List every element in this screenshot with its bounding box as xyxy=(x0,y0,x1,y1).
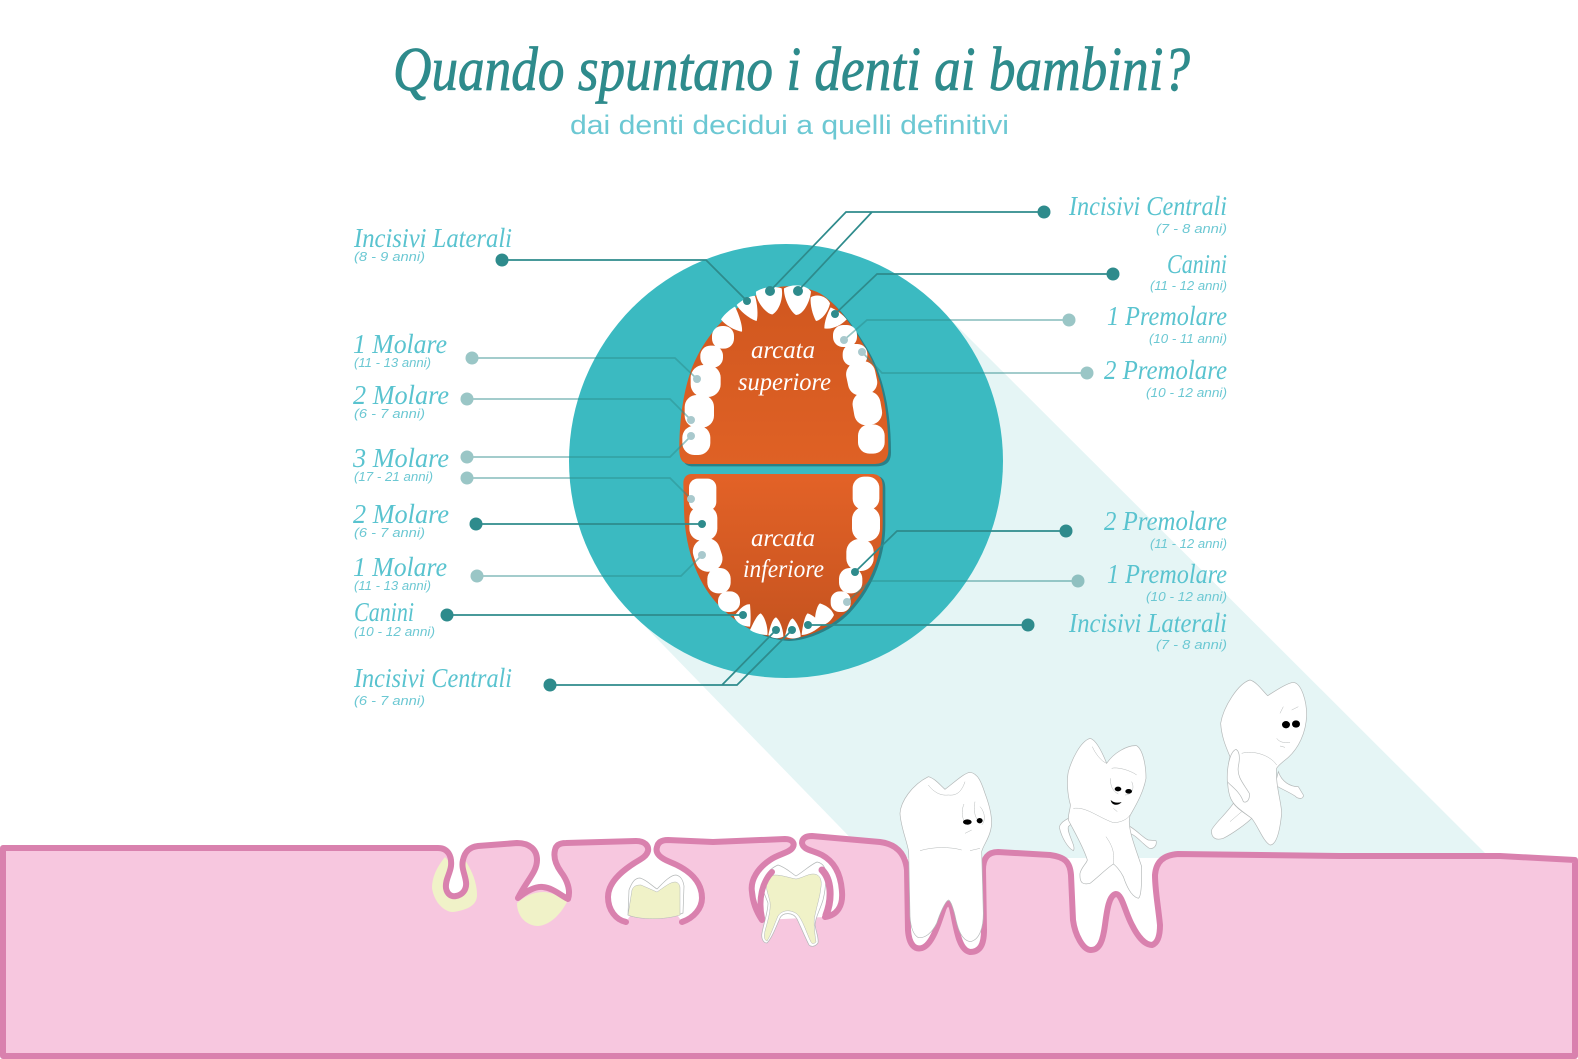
label: 2 Premolare (10 - 12 anni): 2 Premolare xyxy=(1104,355,1227,385)
tooth character 3, running away xyxy=(1212,680,1307,845)
label: Incisivi Centrali (6 - 7 anni): Incisivi Centrali xyxy=(353,663,512,693)
left arm xyxy=(1059,815,1078,851)
gum outline xyxy=(3,836,1575,1056)
label: Canini (11 - 12 anni) xyxy=(1150,249,1227,293)
label: 3 Molare (17 - 21 anni): (17 - 21 anni) xyxy=(354,469,433,484)
label: 3 Molare (17 - 21 anni): 3 Molare xyxy=(352,443,449,473)
back root xyxy=(1212,803,1252,839)
label: 1 Molare (11 - 13 anni) lower: (11 - 13 anni) xyxy=(354,578,431,593)
label: Incisivi Laterali (8 - 9 anni): Incisivi Laterali xyxy=(353,223,512,253)
label: 2 Premolare (10 - 12 anni): (10 - 12 anni) xyxy=(1146,385,1227,400)
leader: lower lateral incisor xyxy=(804,618,1034,632)
label: 2 Molare (6 - 7 anni) lower: (6 - 7 anni) xyxy=(354,525,425,540)
upper teeth xyxy=(682,285,885,455)
tooth with developing roots xyxy=(762,862,826,946)
label: 2 Molare (6 - 7 anni): (6 - 7 anni) xyxy=(354,406,425,421)
text: arcata superiore: superiore xyxy=(738,369,831,396)
leader: upper canine xyxy=(831,268,1120,318)
gum fill xyxy=(3,836,1575,1056)
label: Incisivi Laterali (7 - 8 anni): (7 - 8 anni) xyxy=(1156,637,1227,652)
label: Incisivi Centrali (7 - 8 anni) xyxy=(1068,191,1227,236)
body xyxy=(1221,680,1307,845)
arch gum xyxy=(683,474,883,639)
arch shadow xyxy=(686,476,885,641)
leader: upper second premolar xyxy=(858,348,1094,380)
label: Canini (10 - 12 anni): (10 - 12 anni) xyxy=(354,624,435,639)
leader: upper first molar xyxy=(466,352,701,383)
text: arcata inferiore: inferiore xyxy=(743,556,824,583)
label: Incisivi Centrali (6 - 7 anni) xyxy=(353,663,512,708)
developing tooth bud 2 xyxy=(517,892,567,926)
tooth crown emerging xyxy=(628,875,684,919)
label: 2 Premolare (10 - 12 anni) xyxy=(1104,355,1227,400)
leader: lower first molar xyxy=(470,551,706,582)
label: Incisivi Laterali (7 - 8 anni) xyxy=(1068,608,1227,652)
arch gum xyxy=(679,286,888,464)
text: arcata superiore xyxy=(738,337,831,396)
label: Incisivi Laterali (8 - 9 anni): (8 - 9 anni) xyxy=(354,249,425,264)
label: Incisivi Laterali (8 - 9 anni) xyxy=(353,223,512,264)
label: Canini (11 - 12 anni): (11 - 12 anni) xyxy=(1150,278,1227,293)
label: Canini (10 - 12 anni): Canini xyxy=(354,597,414,627)
leader: lower canine xyxy=(440,608,747,622)
leader: lower second molar xyxy=(470,518,706,530)
arch shadow xyxy=(682,289,891,466)
label: 1 Premolare (10 - 12 anni) xyxy=(1107,559,1227,604)
developing tooth bud 1 xyxy=(432,857,477,912)
gum cross-section xyxy=(3,836,1575,1056)
leader: upper second molar xyxy=(460,392,695,424)
label: 1 Premolare (10 - 11 anni): 1 Premolare xyxy=(1107,301,1227,331)
leader: upper central incisors xyxy=(765,206,1050,296)
label: 2 Molare (6 - 7 anni): 2 Molare xyxy=(353,380,449,410)
title: Quando spuntano i denti ai bambini? xyxy=(393,36,1190,104)
text: arcata superiore: arcata xyxy=(751,337,815,364)
text: arcata inferiore xyxy=(743,525,824,583)
face details xyxy=(920,782,984,851)
label: 2 Premolare (11 - 12 anni) xyxy=(1104,506,1227,551)
leader: upper third molar xyxy=(460,432,695,464)
leader: lower second premolar xyxy=(851,524,1072,576)
teal circle xyxy=(569,244,1003,678)
label: 2 Molare (6 - 7 anni) lower: 2 Molare xyxy=(353,499,449,529)
left arm xyxy=(1227,749,1249,802)
label: Incisivi Centrali (7 - 8 anni): Incisivi Centrali xyxy=(1068,191,1227,221)
upper dental arch xyxy=(679,285,891,466)
label: Incisivi Laterali (7 - 8 anni): Incisivi Laterali xyxy=(1068,608,1227,638)
label: 1 Molare (11 - 13 anni): 1 Molare xyxy=(353,329,447,359)
light beam from the circle to the gum xyxy=(633,308,1490,858)
label: 1 Premolare (10 - 11 anni) xyxy=(1107,301,1227,346)
body xyxy=(1067,738,1146,898)
leader: lower first premolar xyxy=(843,574,1084,606)
face details xyxy=(1230,707,1300,822)
tooth character 2, jumping out xyxy=(1059,738,1156,898)
leader: lower central incisors xyxy=(544,626,796,692)
label: 1 Premolare (10 - 11 anni): (10 - 11 anni) xyxy=(1149,331,1227,346)
leader: lower third molar xyxy=(460,472,695,503)
leader: upper lateral incisor xyxy=(496,254,751,305)
lower teeth xyxy=(689,477,880,639)
leader: upper first premolar xyxy=(840,314,1076,344)
label: Canini (11 - 12 anni): Canini xyxy=(1167,249,1227,279)
label: 1 Molare (11 - 13 anni) lower: 1 Molare xyxy=(353,552,447,582)
label: Incisivi Centrali (6 - 7 anni): (6 - 7 anni) xyxy=(354,693,425,708)
label: 1 Premolare (10 - 12 anni): 1 Premolare xyxy=(1107,559,1227,589)
label: Canini (10 - 12 anni) xyxy=(354,597,435,639)
tooth character 1, in the gum xyxy=(900,772,992,942)
lower dental arch xyxy=(683,474,885,641)
text: arcata inferiore: arcata xyxy=(751,525,815,552)
right arm xyxy=(1127,825,1156,848)
label: 1 Molare (11 - 13 anni): (11 - 13 anni) xyxy=(354,355,431,370)
face details xyxy=(1073,747,1137,864)
label: Incisivi Centrali (7 - 8 anni): (7 - 8 anni) xyxy=(1156,221,1227,236)
right arm xyxy=(1275,772,1303,798)
label: 2 Premolare (11 - 12 anni): 2 Premolare xyxy=(1104,506,1227,536)
subtitle: dai denti decidui a quelli definitivi xyxy=(570,110,1009,140)
label: 2 Premolare (11 - 12 anni): (11 - 12 anni) xyxy=(1150,536,1227,551)
label: 1 Premolare (10 - 12 anni): (10 - 12 anni) xyxy=(1146,589,1227,604)
